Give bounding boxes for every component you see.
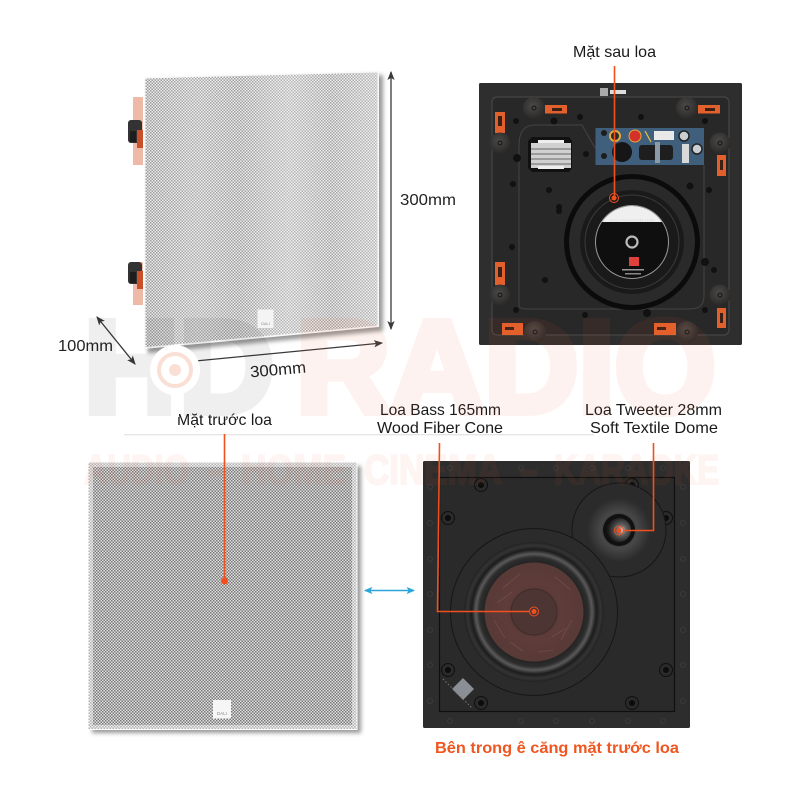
orange clips [495, 105, 726, 335]
inner baffle outline [440, 478, 674, 712]
heading: bass label: Wood Fiber Cone [377, 420, 503, 437]
screws [509, 114, 717, 318]
watermark: KARAOKE [554, 446, 719, 493]
mounting knobs [490, 97, 730, 343]
recess outline [519, 125, 704, 309]
heading: front label: Mặt trước loa [177, 412, 272, 429]
heading: tweeter label [585, 402, 722, 437]
tweeter [572, 483, 666, 577]
baffle [423, 461, 690, 728]
woofer rear: DALI PHANTOM H-60 [610, 218, 655, 223]
leader: rear label [610, 66, 618, 202]
leader: tweeter [614, 443, 654, 535]
icon: logo badge [258, 310, 274, 328]
watermark: HOME [241, 446, 346, 493]
icon: logo badge: DALI [217, 711, 227, 716]
icon: logo badge [213, 700, 231, 718]
grille shadow [148, 75, 383, 353]
woofer rear [564, 174, 700, 310]
woofer [450, 528, 618, 696]
icon: logo plate [443, 678, 474, 708]
leader: front label [221, 434, 228, 584]
label: width: 300mm [249, 360, 307, 381]
grille frame [88, 462, 357, 730]
watermark: CINEMA [364, 446, 502, 493]
grille shadow [92, 466, 361, 733]
clip slots [498, 108, 723, 330]
watermark [84, 293, 719, 493]
panel: front grille [88, 462, 361, 733]
grille catches [442, 478, 672, 710]
input terminal plate [528, 137, 572, 172]
leader: bass [438, 443, 538, 616]
outer frame [492, 97, 729, 335]
icon: logo badge: DALI [261, 322, 270, 326]
panel: rear view of speaker [479, 83, 742, 345]
label: depth: 100mm [58, 338, 113, 355]
rim screw holes [428, 466, 686, 724]
watermark: RADIO [296, 293, 716, 440]
back plate [479, 83, 742, 345]
watermark: HD [84, 293, 274, 440]
watermark: AUDIO [84, 446, 189, 493]
dimension arrow: height [390, 72, 392, 329]
divider [124, 434, 594, 435]
arrow: front to inside [365, 590, 414, 592]
heading: bass label: Loa Bass 165mm [380, 402, 501, 419]
heading: tweeter label: Soft Textile Dome [590, 420, 718, 437]
panel: angled front view of speaker [128, 71, 383, 353]
heading: tweeter label: Loa Tweeter 28mm [585, 402, 722, 419]
heading: rear label: Mặt sau loa [573, 44, 656, 61]
terminal board [596, 128, 704, 165]
heading: bass label [377, 402, 503, 437]
panel: speaker with grille removed [423, 461, 690, 728]
dimension arrow: width [154, 343, 382, 365]
dimension arrow: depth [97, 317, 135, 364]
grille [144, 71, 379, 349]
label: height: 300mm [400, 192, 456, 209]
icon: upper mounting clip [128, 97, 143, 165]
icon: lower mounting clip [128, 262, 143, 305]
grille mesh [93, 467, 352, 725]
watermark: - [520, 446, 538, 493]
caption: inside the grille: Bên trong ê căng mặt trước loa [435, 740, 679, 757]
top serial label [600, 88, 626, 96]
knob centres [498, 106, 722, 334]
watermark: - [206, 446, 224, 493]
